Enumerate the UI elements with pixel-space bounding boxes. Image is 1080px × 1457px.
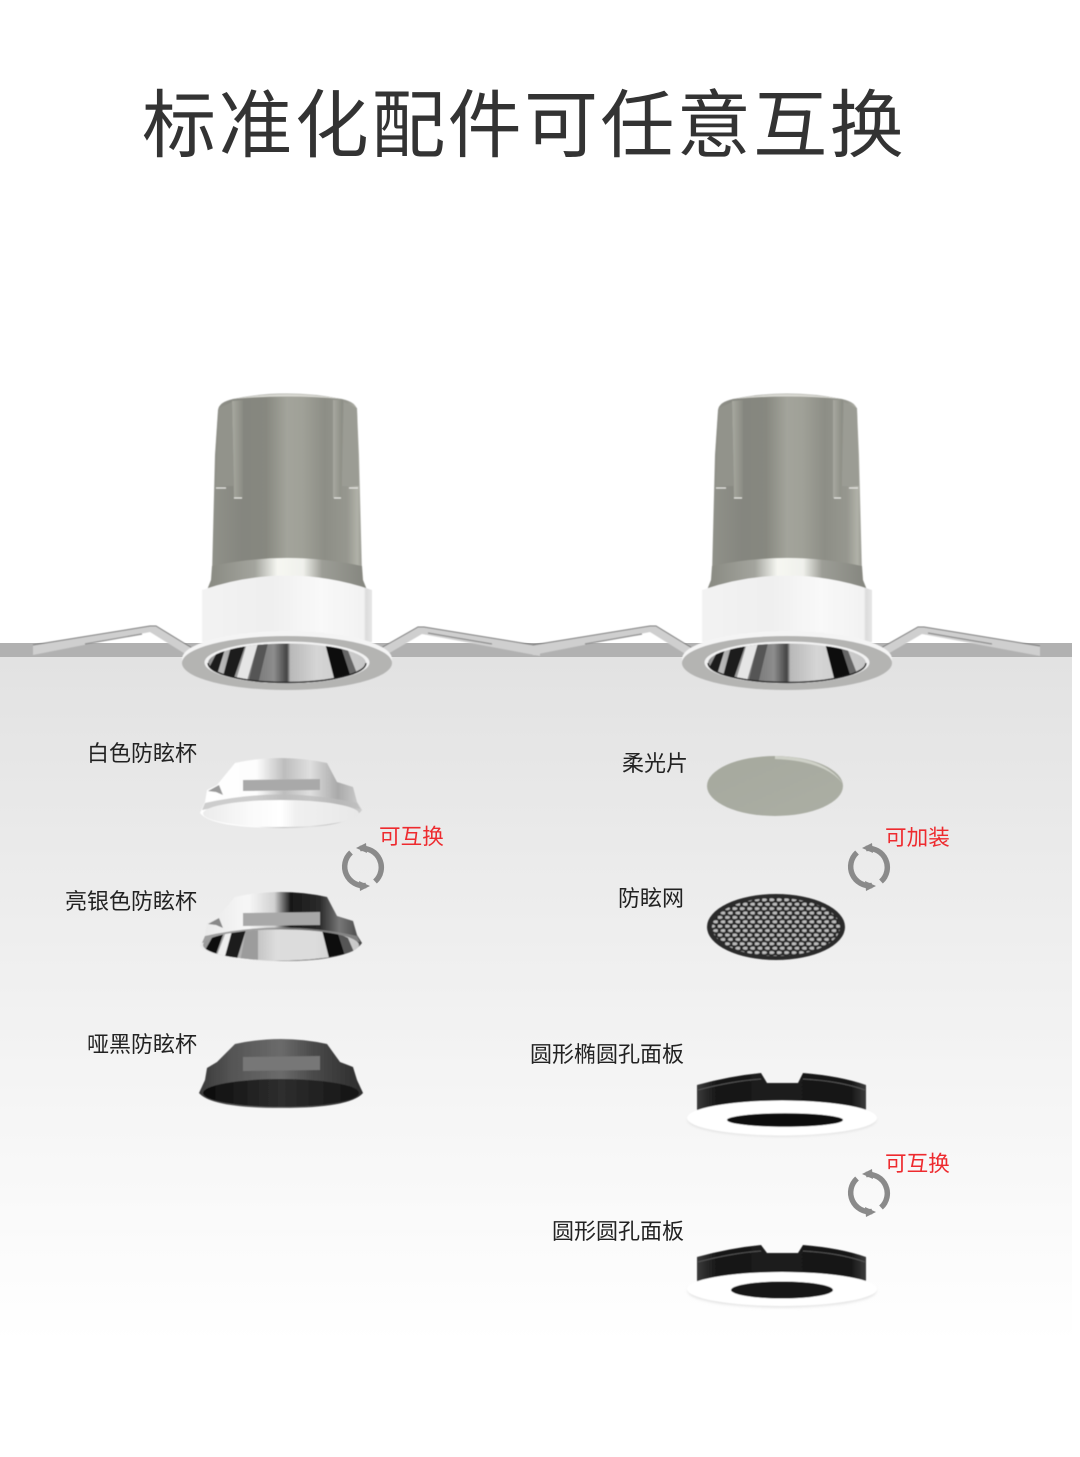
downlight right bbox=[533, 394, 1040, 690]
label: anti-glare mesh: 防眩网 bbox=[618, 886, 684, 911]
label: oval hole panel: 圆形椭圆孔面板 bbox=[530, 1042, 684, 1067]
label: silver cup: 亮银色防眩杯 bbox=[65, 889, 197, 914]
label: diffuser: 柔光片 bbox=[622, 751, 688, 776]
reflector aperture bbox=[204, 640, 370, 686]
red label: interchangeable panels: 可互换 bbox=[885, 1151, 950, 1176]
accessory: matte black anti-glare cup bbox=[199, 1039, 363, 1108]
red label: interchangeable cups: 可互换 bbox=[379, 824, 444, 849]
downlight left bbox=[33, 394, 540, 690]
accessory: honeycomb mesh bbox=[707, 894, 845, 960]
red label: add-on: 可加装 bbox=[885, 825, 950, 850]
icon: swap arrows add-on bbox=[851, 843, 887, 891]
title: 标准化配件可任意互换 bbox=[142, 84, 906, 167]
icon: swap arrows cups bbox=[345, 843, 381, 891]
icon: swap arrows panels bbox=[851, 1169, 887, 1217]
label: round hole panel: 圆形圆孔面板 bbox=[552, 1219, 684, 1244]
metal ring bbox=[207, 558, 367, 590]
spring clip right bbox=[381, 627, 540, 656]
label: white cup: 白色防眩杯 bbox=[87, 741, 197, 766]
accessory: diffuser disc bbox=[707, 756, 843, 816]
accessory: white anti-glare cup bbox=[200, 758, 362, 828]
label: matte black cup: 哑黑防眩杯 bbox=[87, 1032, 197, 1057]
ceiling background bbox=[0, 643, 1072, 1342]
white collar bbox=[202, 576, 372, 642]
heat sink body bbox=[212, 394, 362, 575]
accessory: round panel with oval hole bbox=[687, 1073, 877, 1136]
trim flange bbox=[182, 631, 392, 690]
accessory: bright silver anti-glare cup bbox=[200, 892, 362, 962]
spring clip left bbox=[33, 626, 192, 655]
accessory: round panel with round hole bbox=[687, 1245, 877, 1307]
